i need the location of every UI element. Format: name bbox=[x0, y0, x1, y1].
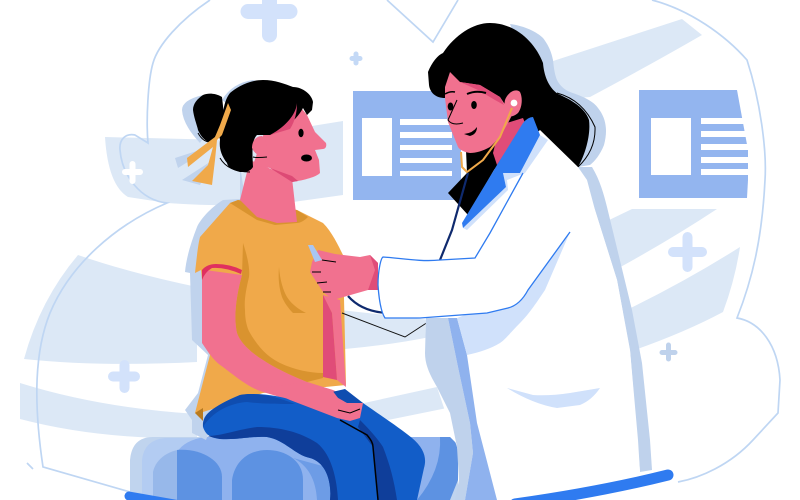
doctor face details bbox=[445, 92, 486, 136]
wrist bbox=[368, 255, 378, 290]
patient face bbox=[253, 103, 326, 182]
sleeve cuff bbox=[202, 264, 242, 280]
doctor neck bbox=[493, 118, 525, 165]
shirt folds bbox=[235, 243, 323, 382]
patient neck bbox=[240, 160, 297, 223]
seat bbox=[130, 437, 458, 500]
patient shadow bbox=[185, 165, 260, 440]
coat lapel bbox=[462, 117, 540, 228]
doctor fringe bbox=[460, 82, 504, 105]
stethoscope chest piece bbox=[308, 245, 322, 262]
doctor sleeve bbox=[378, 173, 570, 318]
patient far arm bbox=[323, 295, 346, 387]
shirt hem shadow bbox=[195, 408, 203, 421]
doctor hair bbox=[428, 23, 589, 170]
floor bar right bbox=[515, 475, 668, 500]
stethoscope bbox=[440, 100, 517, 260]
finger lines bbox=[338, 409, 360, 413]
hair shadows bbox=[175, 80, 262, 185]
fringe bbox=[270, 103, 297, 135]
doctor hair shadow bbox=[510, 24, 606, 167]
hair ribbon bbox=[187, 103, 231, 185]
coat edge shadow bbox=[578, 167, 652, 472]
chest tube line bbox=[342, 313, 428, 337]
finger lines bbox=[312, 260, 336, 292]
hair strand bbox=[557, 93, 595, 167]
doctor face bbox=[445, 72, 512, 153]
patient hair bun bbox=[193, 94, 224, 142]
doctor hand bbox=[310, 250, 378, 300]
stethoscope tube lower bbox=[348, 296, 388, 313]
coat under sleeve light bbox=[457, 232, 570, 355]
doctor coat bbox=[425, 133, 640, 500]
patient ear bbox=[252, 136, 267, 157]
shirt collar bbox=[230, 200, 308, 225]
patient hand bbox=[263, 382, 363, 421]
floor bar left bbox=[129, 496, 180, 500]
patient eye and mouth bbox=[298, 129, 312, 162]
plus icon: small top bbox=[352, 54, 360, 63]
coat lower left shade bbox=[425, 318, 473, 500]
plus icon: white on band bbox=[125, 164, 140, 181]
document panel: centre bbox=[353, 91, 461, 200]
patient hair bbox=[219, 80, 313, 172]
sleeve outline bbox=[378, 173, 570, 318]
patient shirt bbox=[195, 200, 346, 413]
plus icon: lower left bbox=[113, 365, 135, 388]
coat pocket bbox=[507, 388, 600, 408]
background bands bbox=[20, 19, 740, 438]
patient bbox=[175, 80, 363, 440]
coat collar bbox=[463, 135, 548, 230]
doctor ear bbox=[503, 90, 522, 117]
patient jeans bbox=[203, 382, 425, 500]
doctor bbox=[308, 23, 668, 500]
plus icon: small right bbox=[662, 345, 675, 359]
hair wisps bbox=[198, 133, 267, 172]
plus icon: right bbox=[673, 237, 702, 267]
doctor black top bbox=[448, 148, 498, 215]
jeans crease bbox=[340, 420, 378, 500]
document panel: right bbox=[639, 90, 753, 198]
plus icon: top bbox=[248, 0, 290, 35]
coat stripe bbox=[448, 318, 497, 500]
patient arm bbox=[202, 270, 363, 421]
jeans thigh fold bbox=[332, 389, 363, 403]
